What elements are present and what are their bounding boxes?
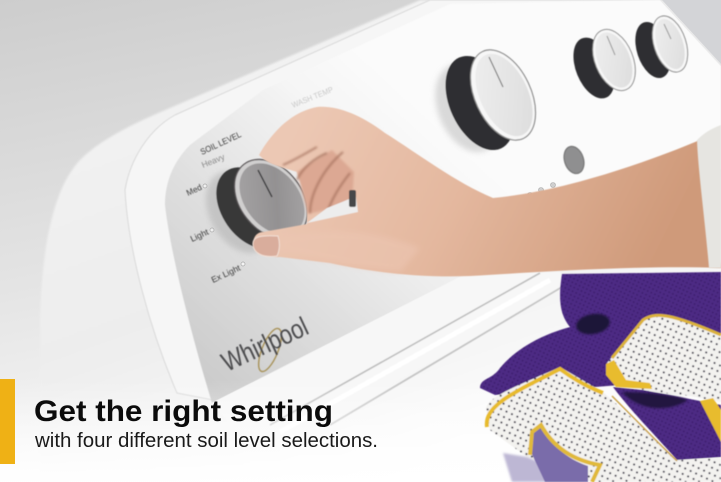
knob seen through fingers: [349, 190, 356, 207]
sleeve: [697, 125, 721, 268]
finger shading: [297, 150, 354, 214]
console outer band: [125, 0, 721, 400]
yellow accent bar: [0, 379, 15, 464]
purple back fabric: [480, 272, 721, 395]
yellow stripe: [700, 398, 721, 442]
caption: [34, 395, 378, 452]
thumbnail: [253, 236, 279, 256]
label: heavy: Heavy: [200, 151, 227, 170]
small console dots: [528, 182, 556, 198]
subheading: with four different soil level selections.: [34, 430, 378, 452]
start button: [561, 144, 587, 176]
label: ex light: Ex Light: [210, 262, 243, 285]
jersey: [480, 272, 721, 482]
bottom fade: [0, 380, 560, 482]
heading: Get the right setting: [34, 395, 333, 428]
gap between fingers: [307, 196, 358, 223]
indicator dots: [203, 184, 245, 266]
lower inset: [530, 427, 588, 482]
label: wash temp: WASH TEMP: [290, 85, 335, 110]
yellow edge: [487, 369, 603, 427]
right knob: [629, 11, 694, 83]
purple side panel: [613, 387, 721, 460]
middle knob: [565, 23, 644, 104]
inset yellow trim: [530, 425, 600, 482]
label: soil level: SOIL LEVEL: [199, 129, 243, 157]
upper mesh panel: [607, 315, 721, 402]
upper mesh yellow trim: [612, 315, 721, 358]
thumb highlight: [280, 231, 420, 272]
dark fold: [622, 392, 688, 408]
yellow chevron: [606, 360, 652, 389]
lower console bands: [212, 272, 570, 435]
hand silhouette: [253, 107, 721, 276]
yellow edge lower: [612, 396, 677, 461]
label: light: Light: [189, 226, 211, 244]
finger creases: [283, 147, 350, 213]
top right shadow: [662, 0, 721, 64]
large knob: [423, 40, 549, 162]
console panel: [165, 0, 721, 403]
table reflection: [503, 453, 587, 482]
soil knob: [192, 145, 323, 265]
arm and hand: [253, 107, 721, 276]
label: med: Med: [185, 182, 204, 198]
whirlpool logo: Whirlpool: [217, 311, 313, 377]
soil level labels: [185, 85, 335, 285]
fold shadow: [575, 311, 611, 337]
main mesh panel: [486, 367, 721, 482]
